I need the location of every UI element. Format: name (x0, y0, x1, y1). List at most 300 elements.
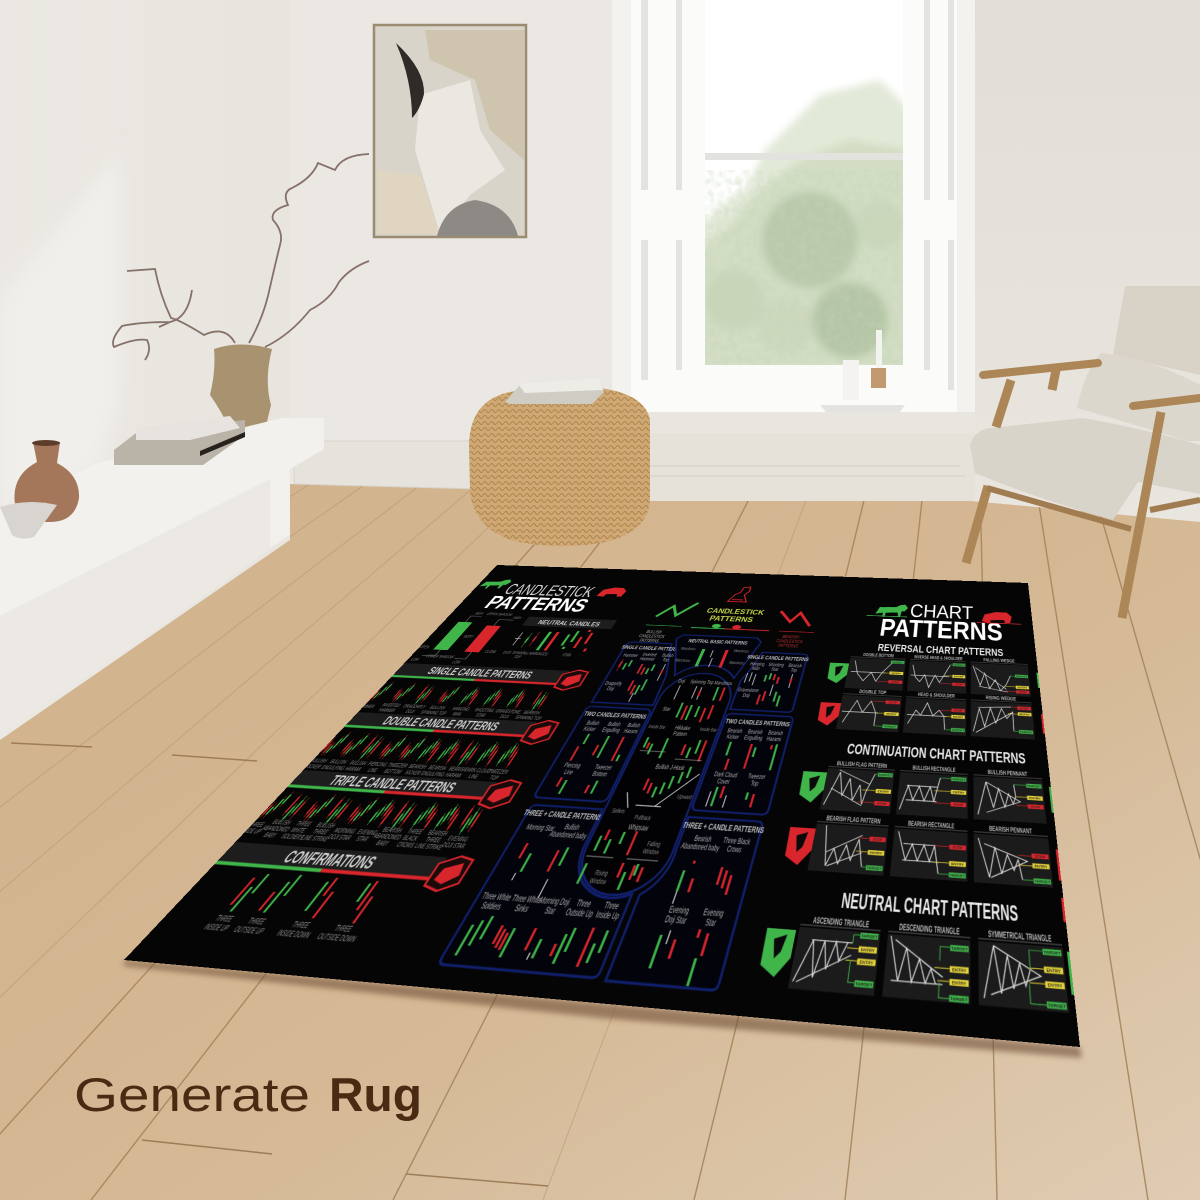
chart: falling wedge (971, 657, 1031, 697)
panel: centre pill: Doji (677, 679, 686, 685)
chart: double top: DOUBLE TOP (859, 689, 902, 697)
single candle labels: GRAVESTONE (494, 708, 522, 715)
neutral candle examples: MARUBOZU (528, 651, 550, 656)
bullish zigzag and label: PATTERNS (638, 639, 660, 644)
neutral candles heading: NEUTRAL CANDLES (536, 619, 620, 629)
chart: bearish rectangle (890, 819, 968, 882)
triple candle labels: THREE (424, 835, 443, 844)
panel: left three plus candle: Morning Star (524, 825, 555, 834)
panel: two candle bearish: Bearish (726, 729, 743, 735)
armchair (966, 286, 1200, 618)
brown vase (14, 440, 79, 522)
chart: bullish pennant: STOP (1031, 805, 1041, 810)
window (612, 0, 975, 501)
chart: bullish pennant: ENTRY (1029, 796, 1041, 801)
panel: bearish single candle: Hanging (749, 662, 765, 668)
triple candle labels: INSIDE UP (237, 826, 264, 835)
single candle labels: BEARISH (522, 709, 542, 716)
vase: woven (210, 344, 272, 432)
triple candle labels: BULLISH (270, 818, 294, 826)
chart: inverse head and shoulder: STOP (955, 683, 963, 687)
chart: symmetrical triangle: ENTRY (1046, 970, 1061, 975)
panel: left three plus candle: Star (542, 908, 556, 918)
single candle labels: DOJI (498, 713, 511, 719)
panel: two candle bullish: Line (562, 770, 574, 777)
chart: bearish pennant: BEARISH PENNANT (989, 825, 1068, 839)
neutral candle examples: SPINNING (511, 650, 530, 655)
panel: right three plus candle: Evening (667, 907, 690, 918)
panel: left three plus candle: Three White (509, 895, 542, 907)
bearish zigzag and label: PATTERNS (777, 644, 798, 650)
icon: bull and bear sculpture (728, 586, 752, 602)
right wall (960, 0, 1200, 522)
chart: bearish pennant (974, 824, 1053, 888)
chart: rising wedge: STOP (1020, 707, 1028, 711)
triple candle labels: BLACK (401, 834, 420, 842)
panel: two candle bearish: Tweezer (747, 774, 766, 782)
chart: symmetrical triangle: TARGET (1048, 1005, 1066, 1010)
strip: double candle patterns: DOUBLE CANDLE PATTERNS (379, 715, 574, 738)
chart: bullish rectangle: STOP (954, 803, 963, 807)
chart: inverse head and shoulder: ENTRY (954, 675, 964, 679)
neutral candle examples: TOP (512, 654, 523, 659)
chart: ascending triangle (788, 915, 882, 996)
panel: right three plus candle: Three Black (722, 838, 751, 848)
panel: bearish single candle: Man (751, 667, 760, 672)
panel: centre pill: Falling (646, 839, 662, 848)
panel: bearish single candle: SINGLE CANDLE PATTERNS (746, 655, 809, 663)
chart: rising wedge: RISING WEDGE (986, 695, 1036, 704)
chart: bullish rectangle: TARGET (952, 778, 966, 782)
double candle labels: BULLISH (308, 757, 330, 764)
triple candle labels: BABY (261, 831, 279, 839)
baseboard (294, 441, 480, 489)
right title: chart patterns (862, 600, 1024, 647)
triple candle labels: LINE STRIKE (413, 841, 445, 851)
panel: centre pill: Hikkake (673, 726, 691, 733)
double candle labels (303, 757, 510, 782)
bullish zigzag and label: BULLISH (645, 630, 662, 635)
panel: two candle bearish: Bearish (767, 731, 784, 738)
double candle labels: PIERCING (366, 760, 390, 768)
centre figure and heading: PATTERNS (708, 614, 764, 625)
panel: bullish single candle: Bullish (661, 654, 674, 659)
double candle row (315, 731, 524, 770)
single candle labels: HAMMER (356, 703, 377, 709)
panel: bullish single candle: Top (661, 658, 669, 663)
double candle labels: LINE (467, 773, 480, 780)
panel: left three plus candle (434, 805, 665, 978)
panel: two candle bullish: Engulfing (600, 728, 621, 735)
panel: left three plus candle: Soldiers (478, 903, 502, 914)
triple candle labels: ABANDONED (371, 831, 404, 841)
strip: double candle patterns (338, 710, 560, 745)
single candle labels: HANGING (451, 706, 471, 712)
chart: bearish rectangle: BEARISH RECTANGLE (908, 820, 995, 834)
icon: shield green continuation (796, 771, 827, 803)
panel: neutral basic patterns: Marubozu (733, 648, 750, 653)
chart: bullish pennant: BULLISH PENNANT (988, 769, 1059, 780)
double candle labels: BEARISH (427, 764, 448, 771)
chart: symmetrical triangle: ENTRY (1048, 985, 1063, 990)
chart: head and shoulder: ENTRY (953, 716, 963, 719)
single candle labels: INVERTED (380, 702, 403, 708)
chart: descending triangle: ENTRY (952, 969, 966, 974)
panel: left three plus candle: Outside Up (563, 909, 594, 921)
chart: double bottom: TARGET (892, 661, 903, 664)
chart: ascending triangle: ASCENDING TRIANGLE (812, 916, 914, 934)
single candle labels (354, 701, 547, 721)
panel: right three plus candle: Crows (725, 846, 742, 856)
triple candle labels: BEARISH (381, 825, 405, 834)
chart: bearish rectangle: ENTRY (951, 863, 964, 867)
panel: two candle bullish: Bullish (585, 721, 600, 728)
panel: centre pill: Inside Bar (647, 723, 667, 730)
chart: bullish flag (820, 760, 895, 814)
panel: centre pill (565, 672, 739, 898)
anatomy of candles: LOW (451, 659, 462, 664)
panel: bullish single candle: Doji (605, 687, 615, 693)
double candle labels: DARK CLOUD (463, 766, 493, 774)
double candle labels: TWEEZER (487, 767, 510, 775)
chart: symmetrical triangle (978, 929, 1069, 1013)
double candle labels: TWEEZER (386, 761, 410, 769)
triple candle labels (234, 816, 474, 853)
rug (124, 565, 1080, 1047)
double candle labels: ENGULFING (419, 770, 447, 778)
panel: centre pill: Inside Bar (699, 726, 718, 733)
chart: head and shoulder: TARGET (951, 729, 964, 733)
double candle labels: BOTTOM (382, 767, 404, 775)
panel: right three plus candle: Evening (702, 909, 724, 921)
double candle labels: HARAMI (343, 765, 363, 772)
chart: bearish pennant: TARGET (1034, 881, 1051, 885)
panel: right three plus candle: Doji Star (663, 916, 687, 928)
chart: bullish pennant (973, 768, 1047, 824)
panel: right three plus candle: Abandoned baby (679, 843, 720, 854)
anatomy of candles: HIGH (512, 615, 523, 620)
panel: left three plus candle: Bullish (562, 824, 580, 833)
panel: centre pill: Spinning Top (689, 680, 714, 686)
chart: bullish flag: STOP (877, 802, 887, 806)
bearish zigzag and label (768, 611, 819, 650)
panel: two candle bearish: TWO CANDLES PATTERNS (724, 719, 791, 729)
panel: bearish single candle: Doji (741, 694, 750, 699)
chart: bearish rectangle: STOP (953, 847, 963, 851)
icon: bull cube (552, 669, 589, 691)
triple candle labels: THREE (246, 820, 267, 829)
panel: right three plus candle (605, 816, 767, 991)
panel: left three plus candle: Three (574, 900, 592, 911)
back wall (290, 0, 640, 490)
panel: two candle bearish: Harami (765, 737, 781, 744)
logo: Generate Rug: Generate (74, 1068, 310, 1121)
panel: centre pill: Pullback (633, 813, 652, 822)
chart: bullish rectangle (896, 764, 968, 819)
panel: bullish single candle: Hammer (638, 657, 655, 663)
chart: inverse head and shoulder: TARGET (953, 664, 965, 667)
double candle labels: BULLISH (348, 759, 369, 766)
icon: bull cube (519, 720, 560, 745)
panel: right three plus candle: Star (703, 919, 717, 930)
panel: centre pill: Star (661, 707, 671, 713)
panel: two candle bullish: Bullish (606, 722, 621, 729)
triple candle labels: CROWS (395, 840, 417, 849)
triple candle labels: EVENING (355, 828, 380, 837)
chart: descending triangle: TARGET (951, 948, 968, 953)
chart: bearish pennant: ENTRY (1034, 866, 1048, 870)
right title: chart patterns: CHART (909, 602, 1000, 625)
double candle labels: BEARISH (447, 765, 469, 773)
triple candle labels: WHITE (289, 826, 308, 834)
panel: two candle bearish: Top (749, 781, 759, 789)
panel: two candle bullish: TWO CANDLES PATTERNS (582, 711, 647, 721)
single candle labels: DOJI (404, 708, 417, 714)
painting (374, 25, 526, 237)
panel: neutral basic patterns: Marubozu (728, 660, 745, 665)
confirmation candles: INSIDE UP (201, 921, 232, 933)
panel: centre pill: Upward (676, 793, 693, 801)
chart: head and shoulder: STOP (954, 709, 962, 713)
icon: green bull (478, 579, 513, 589)
trees (700, 80, 910, 370)
double candle labels: LINE (366, 766, 380, 774)
double candle labels: ENGULFING (319, 764, 347, 771)
single candle labels: SPINNING TOP (514, 714, 543, 721)
panel: two candle bullish: Bullish (626, 723, 641, 730)
chart: rising wedge: ENTRY (1019, 713, 1030, 717)
chart: falling wedge: FALLING WEDGE (983, 658, 1036, 665)
chart: head and shoulder (903, 691, 966, 736)
icon: green bull (875, 604, 908, 618)
triple candle labels: THREE (310, 827, 331, 836)
chart: double top (836, 688, 902, 732)
panel: bearish single candle: Gravestone (736, 688, 759, 694)
chart: double top: STOP (889, 701, 897, 705)
double candle labels: HARAMI (444, 771, 463, 779)
confirmation candles: THREE (289, 919, 313, 930)
confirmation candles: INSIDE DOWN (274, 927, 313, 940)
chart: ascending triangle: TARGET (855, 983, 872, 989)
panel: left three plus candle: Inside Up (593, 912, 620, 923)
confirmation candles: OUTSIDE UP (231, 924, 267, 936)
double candle labels: KICKER (304, 763, 323, 770)
panel: two candle bullish: Piercing (562, 763, 582, 771)
centre figure and heading: CANDLESTICK (705, 607, 780, 618)
panel: bullish single candle: SINGLE CANDLE PATTERNS (620, 645, 682, 653)
bearish zigzag and label: CANDLESTICK (775, 639, 803, 645)
strip: triple candle patterns (280, 767, 523, 809)
triple candle labels: EVENING (446, 834, 470, 843)
chart: rising wedge (971, 695, 1035, 740)
panel: left three plus candle: THREE + CANDLE PATTERNS (521, 809, 603, 823)
neutral candles heading (522, 617, 617, 629)
chart: ascending triangle: ENTRY (859, 962, 873, 967)
icon: red bear (596, 587, 628, 597)
panel: left three plus candle: Sinks (512, 905, 530, 916)
chart: double bottom: ENTRY (891, 672, 901, 675)
panel: bullish single candle: Hammer (622, 654, 639, 659)
panel: two candle bearish: Cover (716, 779, 730, 787)
strip: single candle patterns: SINGLE CANDLE PATTERNS (424, 666, 599, 685)
single candle labels: SPINNING TOP (419, 709, 448, 716)
panel: two candle bearish (691, 713, 794, 815)
chart: ascending triangle: ENTRY (860, 949, 875, 954)
white bowl (0, 502, 57, 539)
chart: descending triangle: ENTRY (952, 982, 966, 987)
chart: bearish flag: BEARISH FLAG PATTERN (826, 815, 923, 829)
panel: bullish single candle: Inverted (641, 653, 657, 658)
panel: centre pill: Rising (593, 868, 610, 878)
confirmation candles: THREE (332, 923, 355, 934)
chart: bullish flag: TARGET (878, 773, 892, 778)
pouf (469, 378, 650, 546)
chart: bearish flag: ENTRY (869, 852, 882, 856)
panel: left three plus candle: Abandoned baby (547, 831, 588, 842)
anatomy of candles: LOWER SHADOW (424, 653, 456, 659)
panel: bullish single candle: Dragonfly (603, 682, 623, 688)
panel: bearish single candle: Shooting (767, 663, 784, 669)
triple candle labels: BULLISH (314, 821, 338, 830)
panel: left three plus candle: Three White (479, 893, 512, 905)
anatomy of candles: CLOSE (483, 649, 498, 654)
chart: bullish rectangle: ENTRY (953, 791, 964, 795)
logo: Generate Rug: Rug (329, 1068, 422, 1121)
chart: inverse head and shoulder (907, 655, 966, 694)
panel: centre pill: Sellers (610, 807, 627, 815)
candlestick word: CANDLESTICK (500, 581, 661, 603)
chart: falling wedge: ENTRY (1017, 686, 1027, 690)
panel: right three plus candle: THREE + CANDLE PATTERNS (681, 822, 765, 836)
single candle labels: BULLISH (428, 704, 447, 711)
triple candle labels: THREE (405, 827, 425, 836)
panel: bearish single candle (728, 652, 811, 713)
chart: bearish flag (807, 814, 889, 876)
neutral candle examples: DOJI (502, 650, 513, 655)
left title: candlestick patterns (456, 579, 631, 617)
triple candle labels: DOJI STAR (440, 840, 467, 850)
chart: bullish rectangle: BULLISH RECTANGLE (912, 765, 992, 777)
triple candle labels: BEARISH (426, 828, 450, 838)
panel: two candle bearish: Dark Cloud (713, 772, 738, 780)
confirmation candles: THREE (213, 913, 236, 924)
panel: two candle bullish: Kicker (582, 727, 597, 733)
icon: shield green reversal (825, 663, 849, 684)
panel: centre pill: Bullish J-Hook (654, 765, 685, 773)
triple candle labels: LINE STRIKE (299, 833, 331, 843)
panel: centre pill: Whipsaw (626, 825, 649, 834)
chart: double bottom: DOUBLE BOTTOM (863, 653, 917, 660)
anatomy of candles: OPEN (418, 644, 431, 649)
triple candle labels: ABANDONED (260, 824, 293, 833)
panel: two candle bullish: Bottom (590, 772, 608, 779)
panel: two candle bullish (533, 706, 652, 802)
stack of books (114, 416, 245, 465)
panel: centre pill: Window (641, 847, 661, 856)
patterns word: PATTERNS (479, 592, 628, 618)
centre figure and heading (691, 586, 784, 631)
panel: bullish single candle (589, 642, 684, 705)
single candle labels: STAR (474, 712, 487, 718)
chart: bearish flag: TARGET (866, 867, 882, 872)
sun patch on wall (0, 150, 120, 510)
single candle labels: HAMMER (377, 707, 397, 713)
panel: bearish single candle: Star (770, 668, 779, 673)
panel: neutral basic patterns: Marubozu (680, 646, 697, 651)
neutral candle examples: STAR (561, 652, 573, 657)
icon: bull cube (422, 855, 475, 892)
anatomy of candles: LOW (409, 657, 421, 662)
double candle labels: KICKER (403, 769, 423, 776)
icon: shield red reversal (816, 702, 841, 726)
edge marks red (1041, 714, 1066, 922)
triple candle labels: BABY (374, 839, 391, 847)
triple candle labels: DOJI STAR (326, 832, 354, 842)
chart: descending triangle (882, 922, 970, 1004)
panel: two candle bearish: Engulfing (743, 736, 763, 743)
panel: neutral basic patterns (658, 635, 762, 679)
anatomy of candles: UPPER SHADOW (486, 612, 514, 617)
panel: centre pill: Window (588, 876, 608, 886)
strip: single candle patterns (387, 662, 589, 691)
chart: descending triangle: TARGET (950, 998, 968, 1004)
chart: symmetrical triangle: TARGET (1043, 952, 1061, 957)
icon: red bear (982, 612, 1012, 624)
triple candle labels: MORNING (332, 826, 358, 835)
strip: triple candle patterns: TRIPLE CANDLE PATTERNS (324, 774, 528, 801)
bench (0, 418, 324, 734)
panel: neutral basic patterns: Marubozu (674, 658, 691, 663)
chart: rising wedge: TARGET (1020, 731, 1033, 735)
chart: bullish flag: ENTRY (877, 790, 889, 794)
triple candle labels: SOLDIERS (279, 832, 306, 841)
double candle labels: BULLISH (328, 758, 349, 765)
chart: double top: TARGET (883, 725, 896, 729)
double candle labels: TOP (488, 774, 501, 781)
panel: left three plus candle: Three (602, 902, 620, 913)
panel: two candle bearish: Bearish (747, 730, 763, 737)
rug shadow (124, 960, 1082, 1058)
branches (113, 154, 369, 360)
chart: bearish pennant: STOP (1035, 856, 1046, 860)
strip: confirmations (206, 840, 475, 892)
icon: bull cube (476, 779, 523, 809)
panel: centre pill: Pattern (671, 732, 688, 739)
panel: bearish single candle: Top (790, 669, 797, 674)
panel: bearish single candle: Bearish (788, 664, 802, 669)
anatomy of candles (406, 610, 527, 666)
chart: falling wedge: STOP (1019, 691, 1027, 694)
chart: bearish flag: STOP (872, 839, 883, 843)
chart: double top: ENTRY (886, 713, 897, 716)
triple candle row (254, 791, 486, 836)
left wall (0, 0, 290, 740)
edge marks (1036, 673, 1074, 995)
panel: two candle bullish: Harami (622, 729, 639, 736)
panel: right three plus candle: Bearish (693, 836, 712, 845)
chart: bullish flag: BULLISH FLAG PATTERN (836, 761, 926, 773)
confirmation candles: THREE (245, 915, 269, 926)
chart: double bottom: STOP (891, 681, 899, 684)
icon: shield green neutral (756, 928, 796, 978)
neutral candle examples (499, 627, 598, 662)
chart: bullish pennant: TARGET (1027, 784, 1041, 789)
single candle labels: DRAGONFLY (402, 703, 428, 710)
bullish zigzag and label: CANDLESTICK (637, 634, 665, 640)
panel: two candle bearish: Kicker (725, 735, 740, 742)
bearish zigzag and label: BEARISH (782, 635, 799, 640)
anatomy of candles: BODY (463, 634, 475, 639)
